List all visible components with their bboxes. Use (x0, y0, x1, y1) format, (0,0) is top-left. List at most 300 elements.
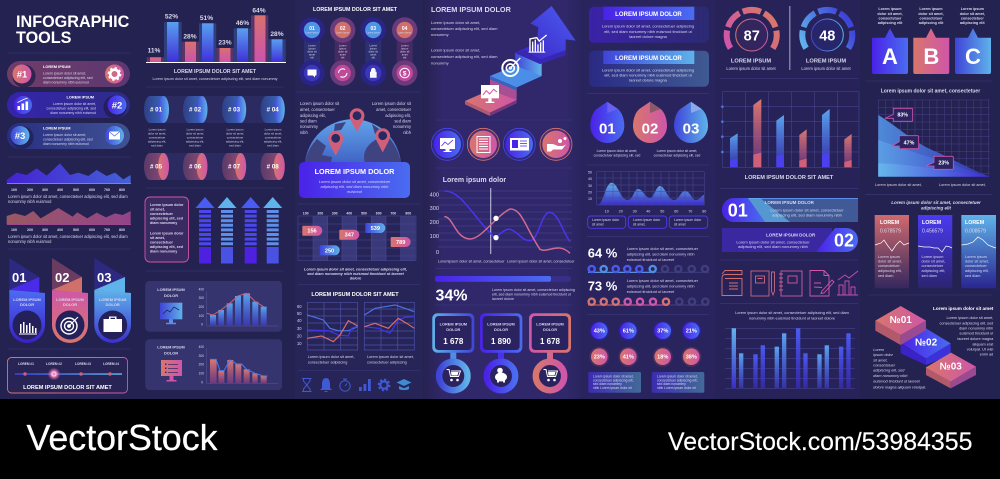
cylinder captions: sed diam (151, 144, 163, 148)
cylinder captions: dolor sit amet, (264, 132, 282, 136)
linked circles: dolor sit (400, 50, 410, 54)
blocks text left: sit amet, (873, 358, 888, 362)
cylinder captions: adipiscing elit, (186, 140, 204, 144)
blocks text right: volutpat. Ut wisi (967, 348, 993, 352)
banner 01 (722, 198, 858, 222)
tag 347: 347 (345, 233, 354, 239)
linked circles: amet (402, 52, 408, 56)
image id: VectorStock.com/53984355 (668, 428, 972, 456)
callout text box (145, 197, 188, 262)
line chart: Loremipsum dolor sit amet, consectetuer (438, 260, 505, 264)
dual line charts: 50 (297, 311, 302, 316)
isometric blocks: №02 (915, 338, 938, 348)
option pill #2: #2 (112, 100, 122, 112)
option pill #3 (7, 123, 130, 149)
area chart: blue: nonummy nibh euismod (8, 199, 52, 204)
callout 83%: 83% (897, 113, 908, 119)
grid table with tags: 300 (332, 212, 338, 216)
blocks text left: adipiscing elit, sed (873, 369, 905, 373)
option pill #1 (7, 61, 130, 88)
timeline box (8, 358, 128, 393)
icon: bell (320, 378, 332, 392)
ABC blurb text: Lorem ipsum (878, 7, 902, 11)
icon: sync (338, 69, 347, 77)
icon: bar chart (19, 322, 37, 334)
callout text box: adipiscing elit, sed (150, 216, 184, 220)
linked circles: elit (310, 56, 314, 60)
ribbon 02: LOREM IPSUM (56, 297, 84, 302)
globe with map pins (305, 108, 401, 163)
wave area chart: 40 (588, 177, 592, 181)
cylinder captions: Lorem ipsum (265, 128, 282, 132)
cylinder row: pink: # 05 (150, 164, 163, 170)
option pill #1: consectetuer adipiscing elit, sed (43, 76, 93, 80)
cylinder captions: Lorem ipsum (187, 128, 204, 132)
callout text box: Lorem ipsum dolor (150, 203, 184, 207)
cylinder captions: sed diam (267, 144, 279, 148)
blocks text right: Lorem ipsum dolor sit amet, (946, 316, 993, 320)
percent circles: 18% (657, 355, 668, 361)
ABC blurb text: adipiscing elit (919, 21, 944, 25)
metric 73 %: Lorem ipsum dolor sit amet, consectetuer (627, 278, 699, 283)
cylinder row: pink: # 07 (228, 164, 241, 170)
ABC blurb text: consectetuer (879, 17, 902, 21)
ribbon 02 (52, 258, 88, 343)
wave area chart: 10 (588, 197, 592, 201)
linked circles: Lorem ipsum (336, 32, 349, 34)
timeline box: LOREM #4 (103, 362, 119, 366)
callout text box: sit amet, (150, 208, 165, 212)
panel: indigo banner: LOREM IPSUM DOLOR (615, 11, 682, 18)
table caption: sed diam nonummy nibh euismod tincidunt ut laoreet (307, 272, 405, 276)
bar chart: 28% (183, 34, 197, 40)
bar chart: 51% (200, 15, 213, 22)
bar chart: 52% (165, 14, 178, 20)
data card 2: 0.456579 (922, 228, 943, 234)
stat card 2: LOREM IPSUM (487, 322, 515, 326)
tile C: C (965, 44, 981, 69)
area chart: pink: 500 (73, 228, 79, 232)
slanted bar chart (721, 92, 859, 167)
stat card 1: DOLOR (446, 327, 461, 332)
globe text left: sed diam (300, 118, 317, 124)
panel: pink column chart: 100 (199, 372, 204, 376)
ribbon 01: 01 (12, 270, 26, 285)
callout text box: Lorem ipsum dolor (150, 232, 184, 236)
wave area chart: 30 (633, 210, 637, 214)
line chart: Lorem ipsum dolor sit amet, consectetuer (507, 260, 575, 264)
timeline box: LOREM IPSUM DOLOR SIT AMET (23, 385, 112, 391)
column 7 (865, 7, 996, 389)
drop badge 01: 01 (599, 120, 616, 138)
drop captions: consectetuer adipiscing elit, sed (654, 154, 701, 158)
progress value: 34% (436, 288, 468, 305)
outlined notes (588, 216, 708, 228)
stat card 1 (432, 313, 474, 390)
panel: blue column chart: 0 (201, 322, 203, 326)
globe text left: nonummy (300, 124, 319, 129)
dual line charts: 30 (297, 326, 302, 331)
disc: monitor (431, 128, 463, 160)
banner 02: LOREM IPSUM DOLOR (766, 233, 816, 238)
panel: blue banner: elit, sed diam nonummy nibh euismod tincidunt ut (604, 72, 693, 78)
line chart: 200 (430, 220, 439, 226)
blue caption box: adipiscing elit, sed diam nonummy nibh (321, 184, 388, 189)
percent circles: 21% (686, 329, 697, 335)
ABC blurb text: dolor sit amet, (960, 12, 985, 16)
linked circles: elit (403, 56, 407, 60)
timeline box: LOREM #2 (46, 362, 62, 366)
linked circles: elit (372, 56, 375, 60)
cylinder row: blue: # 04 (267, 106, 279, 114)
line chart: 100 (430, 234, 439, 240)
option pill #3: LOREM IPSUM (43, 126, 70, 130)
banner 02: Lorem ipsum dolor sit amet, consectetuer (736, 240, 810, 244)
tile A (872, 28, 908, 74)
option pill #2: consectetuer adipiscing elit, sed (46, 106, 96, 110)
title: INFOGRAPHIC (16, 13, 130, 31)
banner 01: Lorem ipsum dolor sit amet, consectetuer (770, 208, 844, 212)
linked circles: 03 (371, 26, 376, 32)
stat card 2 (480, 313, 522, 390)
icon: dollar coin: $ (403, 70, 407, 78)
disc: document (467, 128, 499, 160)
panel: blue column chart: DOLOR (164, 293, 178, 298)
area chart: pink: nonummy nibh euismod (8, 239, 52, 244)
gauge 87: Lorem ipsum dolor sit amet (726, 66, 777, 71)
intro text: consectetuer adipiscing elit, sed diam (431, 26, 498, 31)
dual line charts: 60 (297, 304, 302, 309)
disc: helping hand (540, 128, 572, 160)
drop badge 02: 02 (642, 120, 658, 138)
heading: adipiscing elit (921, 206, 951, 210)
bar chart: 64% (252, 8, 266, 14)
callout text box: consectetuer (150, 212, 174, 216)
data card 1: adipiscing elit, (878, 269, 902, 273)
heading: LOREM IPSUM DOLOR (431, 5, 512, 14)
outline icon row (722, 270, 858, 296)
percent circles (589, 321, 701, 367)
linked circles: amet (309, 52, 315, 56)
globe text right: adipiscing elit, (385, 113, 411, 118)
panel: blue banner: laoreet dolore magna (629, 78, 668, 82)
area chart: blue: 700 (104, 188, 110, 192)
linked circles: dolor sit (369, 50, 378, 54)
cylinder captions: sed diam (189, 144, 201, 148)
dual line charts: Lorem ipsum dolor sit amet, (367, 355, 414, 359)
stat card 2: 1 890 (491, 337, 512, 346)
cylinder captions: consectetuer (149, 136, 165, 140)
icon: graduation cap (396, 379, 412, 390)
option pill #1: LOREM IPSUM (43, 64, 70, 69)
option pill #2: Lorem ipsum dolor sit amet, (53, 102, 96, 106)
option pill #3: Lorem ipsum dolor sit amet, (43, 133, 86, 137)
data card 2: adipiscing elit, (922, 269, 945, 273)
grid table with tags (298, 212, 416, 261)
ribbon 03: LOREM IPSUM (99, 297, 126, 302)
timeline box: LOREM #3 (75, 362, 91, 366)
panel: blue column chart: 100 (199, 314, 204, 318)
panel: blue banner: LOREM IPSUM DOLOR (615, 55, 682, 62)
line chart: 300 (430, 206, 439, 212)
icon: target (61, 317, 78, 334)
globe text left: Lorem ipsum dolor sit (300, 101, 340, 106)
ribbon 01: LOREM IPSUM (13, 297, 41, 302)
column 4 (430, 5, 576, 390)
callout 23%: 23% (938, 161, 949, 167)
block 03 (926, 353, 976, 388)
stacked area chart: Lorem ipsum dolor sit amet, (939, 183, 986, 187)
tag 539: 539 (371, 226, 380, 232)
column 6 (717, 1, 862, 388)
stacked area chart: Lorem ipsum dolor sit amet, (875, 183, 922, 187)
bar chart: 23% (218, 40, 232, 46)
gauge 48: LOREM IPSUM (806, 58, 846, 64)
icon: rising bars (359, 379, 371, 391)
heading: Lorem ipsum dolor sit amet (933, 306, 994, 311)
ribbon 03 (94, 258, 131, 343)
info box right: consectetuer adipiscing elit, (657, 378, 698, 382)
panel: blue column chart: 200 (199, 305, 204, 309)
gauge divider (788, 6, 791, 70)
stat card 2: DOLOR (494, 327, 508, 332)
blue caption box (299, 162, 410, 198)
info box left (588, 372, 641, 393)
blue caption box: Lorem ipsum dolor sit amet, consectetuer (319, 179, 391, 184)
tile A: A (882, 44, 898, 69)
blue step (490, 53, 542, 91)
bar chart: 11% (148, 48, 161, 54)
stat card 1: 1 678 (443, 337, 464, 346)
area chart: blue: 500 (73, 188, 79, 192)
panel: pink column chart: LOREM IPSUM (157, 344, 185, 350)
panel: blue banner (589, 51, 709, 87)
icon: signed document (810, 270, 834, 296)
linked circles: ipsum (401, 46, 409, 50)
area chart: pink: 700 (104, 228, 110, 232)
linked circles: Lorem ipsum (367, 32, 380, 34)
drop badge 03 (674, 102, 708, 143)
banner 01: adipiscing elit, sed diam nonummy nibh (772, 212, 842, 218)
cylinder captions: consectetuer (227, 136, 243, 140)
cylinder row: pink: # 06 (189, 164, 202, 170)
data card 1: sed diam (878, 274, 893, 278)
icon discs (431, 128, 572, 160)
panel: pink column chart: 0 (201, 380, 203, 384)
outlined notes: Lorem ipsum dolor (633, 218, 661, 222)
blocks text left: diam nonummy nibh (873, 374, 908, 378)
data card 2: dolor sit amet, (922, 260, 945, 264)
dual line charts (297, 302, 414, 364)
drop badge 02 (633, 102, 667, 143)
area chart: pink: Lorem ipsum dolor sit amet, consectetuer adipiscing elit, sed diam (8, 234, 128, 239)
ribbon 03: 03 (97, 270, 111, 285)
tag 789: 789 (396, 240, 405, 246)
ABC blurb text (877, 7, 985, 25)
outlined notes: sit amet (592, 222, 604, 226)
data card 1: LOREM (880, 220, 900, 226)
area chart: pink: 100 (11, 228, 17, 232)
linked circles: ipsum (370, 46, 378, 50)
map pin (350, 108, 364, 132)
stacked area chart (875, 100, 990, 187)
panel: pink column chart (145, 339, 282, 390)
intro text: nonummy (431, 60, 449, 66)
progress text: Lorem ipsum dolor sit amet, consectetuer adipiscing (492, 288, 575, 292)
icon: monitor (481, 85, 499, 103)
area chart: blue: 100 (11, 188, 17, 192)
cylinder row: pink: # 08 (267, 164, 279, 170)
indigo arrow (514, 6, 576, 64)
blocks text left: Lorem (873, 348, 884, 352)
gauge 87 (717, 1, 786, 71)
linked circles: dolor sit (307, 50, 317, 54)
info box left: Lorem ipsum dolor sit amet, (593, 374, 634, 378)
dual line charts: 20 (297, 334, 302, 338)
info box left: nibh Lorem ipsum dolor sit (593, 386, 632, 390)
globe text left: adipiscing elit, (300, 113, 326, 118)
panel: indigo banner (589, 7, 709, 43)
data card 3: 0.008579 (965, 228, 986, 234)
column 5 (587, 7, 709, 393)
icon row (302, 378, 412, 392)
callout text box: consectetuer (150, 240, 174, 244)
ABC blurb text: consectetuer (961, 17, 984, 21)
gauge 48: 48 (819, 28, 835, 44)
banner 02: adipiscing elit, sed diam nonummy nibh (738, 244, 808, 249)
panel: pink column chart: 300 (199, 354, 204, 358)
linked circles: Lorem (308, 44, 317, 48)
area chart: blue: Lorem ipsum dolor sit amet, consectetuer adipiscing elit, sed diam (8, 194, 128, 199)
ribbon 03: DOLOR (106, 302, 120, 307)
linked circles: Lorem ipsum (305, 32, 319, 34)
line chart (430, 177, 575, 264)
callout text box: diam nonummy (150, 221, 178, 225)
area chart: blue: 400 (57, 188, 63, 192)
icon: cart (446, 370, 460, 381)
metric 64 %: euismod tincidunt ut laoreet (627, 257, 675, 262)
ribbon 01: DOLOR (20, 302, 34, 307)
line chart: Lorem ipsum dolor (443, 177, 506, 184)
stat card 1: LOREM IPSUM (440, 322, 467, 326)
cylinder captions: consectetuer (187, 136, 203, 140)
metric 64 %: adipiscing elit, sed diam nonummy nibh (627, 252, 695, 256)
dual line charts: 10 (297, 341, 302, 346)
cylinder captions: consectetuer (265, 136, 281, 140)
option pill #1: diam nonummy nibh euismod (43, 80, 89, 84)
metric 73 % (588, 278, 709, 306)
info box left: consectetuer adipiscing elit, (593, 378, 634, 382)
panel: blue column chart: 300 (199, 296, 204, 300)
data card 2: LOREM (922, 220, 942, 226)
panel: indigo banner: elit, sed diam nonummy nibh euismod tincidunt ut (604, 29, 693, 34)
option pill #1: #1 (17, 70, 28, 80)
data card 3: LOREM (965, 220, 985, 226)
globe text right: nonummy (393, 124, 412, 129)
grid table with tags: 700 (390, 212, 396, 216)
line chart: 400 (430, 192, 439, 198)
percent circles: 41% (623, 355, 634, 361)
grid table with tags: 400 (346, 212, 352, 216)
wave area chart: 50 (660, 210, 664, 214)
linked circles: amet (370, 52, 377, 56)
title: TOOLS (16, 29, 72, 47)
blocks text right: aliquam erat (972, 342, 994, 346)
metric 64 % (588, 246, 709, 273)
cylinder row: blue: # 02 (189, 106, 202, 114)
isometric blocks (875, 306, 994, 388)
stat card 3: DOLOR (543, 327, 557, 332)
heading: LOREM IPSUM DOLOR SIT AMET (313, 7, 398, 13)
tile C (955, 28, 991, 74)
gauge 87: 87 (744, 28, 760, 44)
bar chart: 28% (270, 31, 284, 38)
map pin (375, 128, 390, 152)
tile B: B (923, 44, 939, 69)
icon: notebook and pencil (751, 271, 774, 296)
icon: piggy bank (495, 368, 507, 382)
icon: target (502, 58, 520, 76)
dual line charts: 40 (297, 318, 302, 323)
table caption: Lorem ipsum dolor sit amet, consectetuer adipiscing elit, (304, 268, 407, 272)
wave area chart: 10 (605, 210, 609, 214)
data card 1: dolor sit amet, (878, 260, 902, 264)
grid table with tags: 500 (361, 212, 367, 216)
globe text left: amet, consectetuer (300, 107, 335, 112)
intro text: nonummy (431, 32, 449, 37)
info box right: sed diam nonummy (657, 382, 686, 386)
info box right: nibh Lorem ipsum dolor sit (657, 386, 696, 390)
area chart: blue: 300 (42, 188, 48, 192)
icon: monitor (160, 303, 182, 324)
callout text box: sit amet, (150, 236, 165, 240)
area chart: pink: 400 (57, 228, 63, 232)
banner 01: 01 (728, 201, 748, 221)
dual line charts: consectetuer adipiscing (367, 360, 407, 364)
option pill #3: diam nonummy nibh euismod (43, 142, 89, 146)
cylinder row: blue: # 03 (228, 106, 241, 114)
icon: book (722, 270, 742, 296)
cylinder captions: dolor sit amet, (148, 132, 166, 136)
cylinder captions: adipiscing elit, (226, 140, 244, 144)
panel: pink column chart: 200 (199, 362, 204, 366)
wave area chart: 80 (702, 210, 706, 214)
linked circles: Lorem (369, 44, 378, 48)
ribbon 02: 02 (55, 270, 69, 285)
drop badge 01 (590, 102, 624, 143)
panel: blue column chart: 400 (199, 288, 204, 292)
drop captions: Lorem ipsum dolor sit amet, (657, 149, 697, 153)
area chart: blue (7, 163, 131, 204)
blocks text left: euismod tincidunt ut laoreet (873, 380, 921, 384)
linked circles: Lorem (401, 44, 409, 48)
info box left: sed diam nonummy (593, 382, 622, 386)
data card 1: 0.678579 (880, 228, 901, 234)
drop captions: Lorem ipsum dolor sit amet, (597, 149, 637, 153)
disc: id card (503, 128, 535, 160)
blocks text right: enim ad (980, 353, 993, 357)
gauge 87: LOREM IPSUM (731, 58, 771, 64)
cylinder captions: adipiscing elit, (264, 140, 282, 144)
column 2 (144, 8, 286, 390)
tile B (913, 28, 949, 74)
ABC blurb text: adipiscing elit (878, 21, 903, 25)
callout text box: diam nonummy (150, 250, 178, 254)
timeline box: LOREM #1 (18, 362, 34, 366)
outlined notes: Lorem ipsum dolor (674, 218, 702, 222)
watermark band (0, 399, 1000, 479)
blocks text right: laoreet dolore magna (957, 337, 994, 341)
